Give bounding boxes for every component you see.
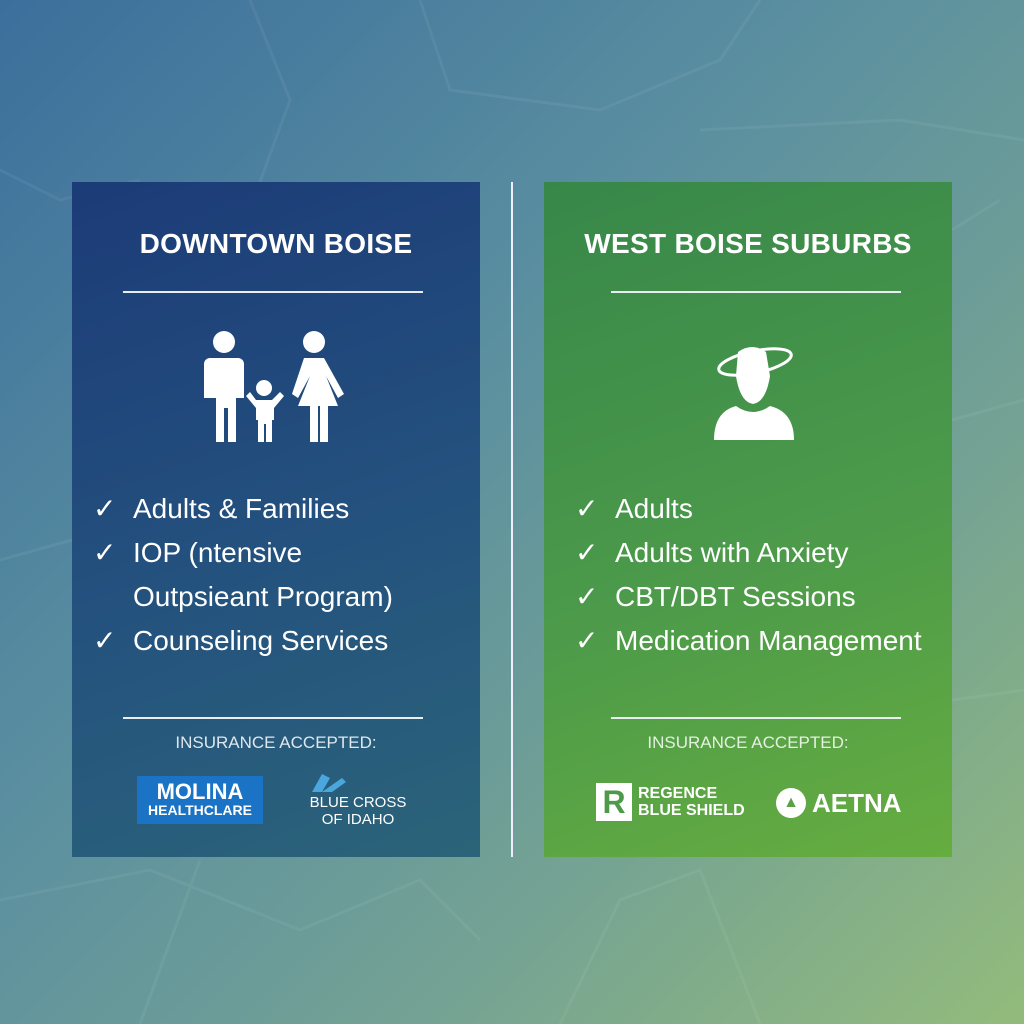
panel: downtown boise	[72, 182, 480, 857]
list: services: Medication Management	[615, 625, 922, 656]
logo: regence	[596, 783, 745, 821]
list: services: ✓	[575, 537, 598, 568]
logo: aetna: AETNA	[812, 788, 902, 818]
list: services: Counseling Services	[133, 625, 388, 656]
list: services: ✓	[575, 581, 598, 612]
logo: molina	[137, 776, 263, 824]
panel: west boise suburbs: R	[602, 784, 626, 820]
logo: blue cross of idaho	[310, 774, 406, 828]
panel: west boise suburbs: BLUE SHIELD	[638, 802, 745, 819]
heading: downtown boise: DOWNTOWN BOISE	[140, 228, 412, 259]
list: services: Adults & Families	[133, 493, 349, 524]
logo: blue cross of idaho: BLUE CROSS	[310, 794, 406, 811]
logo: molina: HEALTHCLARE	[148, 802, 252, 818]
list: services	[575, 493, 922, 656]
icon: person with anxiety	[714, 347, 794, 440]
list: services: ✓	[575, 493, 598, 524]
list: services: CBT/DBT Sessions	[615, 581, 856, 612]
text: insurance accepted: INSURANCE ACCEPTED:	[647, 733, 849, 752]
list: services: Outpsieant Program)	[133, 581, 393, 612]
panel: west boise suburbs: REGENCE	[638, 785, 717, 802]
logo: blue cross of idaho: OF IDAHO	[322, 811, 394, 828]
logo: molina: MOLINA	[157, 779, 243, 804]
divider	[511, 182, 513, 857]
list: services: ✓	[575, 625, 598, 656]
list: services: ✓	[93, 625, 116, 656]
panel: west boise suburbs	[544, 182, 952, 857]
list: services: ✓	[93, 537, 116, 568]
list: services: Adults	[615, 493, 693, 524]
text: insurance accepted: INSURANCE ACCEPTED:	[175, 733, 377, 752]
icon: family	[204, 331, 344, 442]
heading: west boise suburbs: WEST BOISE SUBURBS	[584, 228, 912, 259]
logo: aetna: ▲	[783, 794, 799, 811]
list: services: ✓	[93, 493, 116, 524]
list: services: Adults with Anxiety	[615, 537, 848, 568]
list: services	[93, 493, 393, 656]
list: services: IOP (ntensive	[133, 537, 302, 568]
